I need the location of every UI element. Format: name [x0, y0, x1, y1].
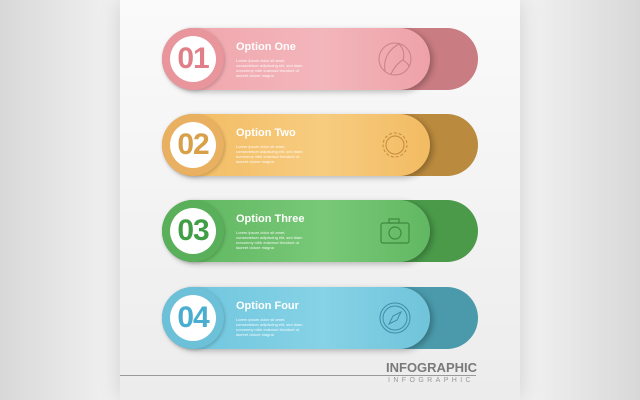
- badge 01: [162, 28, 224, 90]
- badge 04: [162, 287, 224, 349]
- badge 02: [162, 114, 224, 176]
- row 3: option three: [161, 198, 478, 267]
- footer subtitle: INFOGRAPHIC: [388, 377, 474, 384]
- heading: Option One: [236, 41, 296, 53]
- footer title: INFOGRAPHIC: [386, 360, 477, 375]
- row 1: option one: [161, 26, 478, 95]
- badge 03: [162, 200, 224, 262]
- badge 03: 03: [177, 214, 209, 247]
- icon: beach ball: [378, 42, 412, 76]
- heading: Option Four: [236, 300, 299, 312]
- badge 04: 04: [177, 301, 209, 334]
- body text: Lorem ipsum dolor sit amet, consectetuer adipiscing elit, sed diam nonummy nibh euismod tincidunt ut laoreet dolore magna: [236, 58, 302, 78]
- row 4: option four: [161, 286, 478, 354]
- body text: Lorem ipsum dolor sit amet, consectetuer adipiscing elit, sed diam nonummy nibh euismod tincidunt ut laoreet dolore magna: [236, 230, 302, 250]
- icon: camera: [380, 218, 410, 244]
- icon: compass: [380, 302, 410, 334]
- heading: Option Three: [236, 213, 304, 225]
- background panel: [120, 0, 520, 400]
- badge 02: 02: [177, 128, 209, 161]
- heading: Option Two: [236, 127, 296, 139]
- icon: sun: [382, 132, 408, 158]
- badge 01: 01: [177, 42, 209, 75]
- row 2: option two: [161, 112, 478, 181]
- body text: Lorem ipsum dolor sit amet, consectetuer adipiscing elit, sed diam nonummy nibh euismod tincidunt ut laoreet dolore magna: [236, 144, 302, 164]
- body text: Lorem ipsum dolor sit amet, consectetuer adipiscing elit, sed diam nonummy nibh euismod tincidunt ut laoreet dolore magna: [236, 317, 302, 337]
- baseline: [120, 375, 476, 376]
